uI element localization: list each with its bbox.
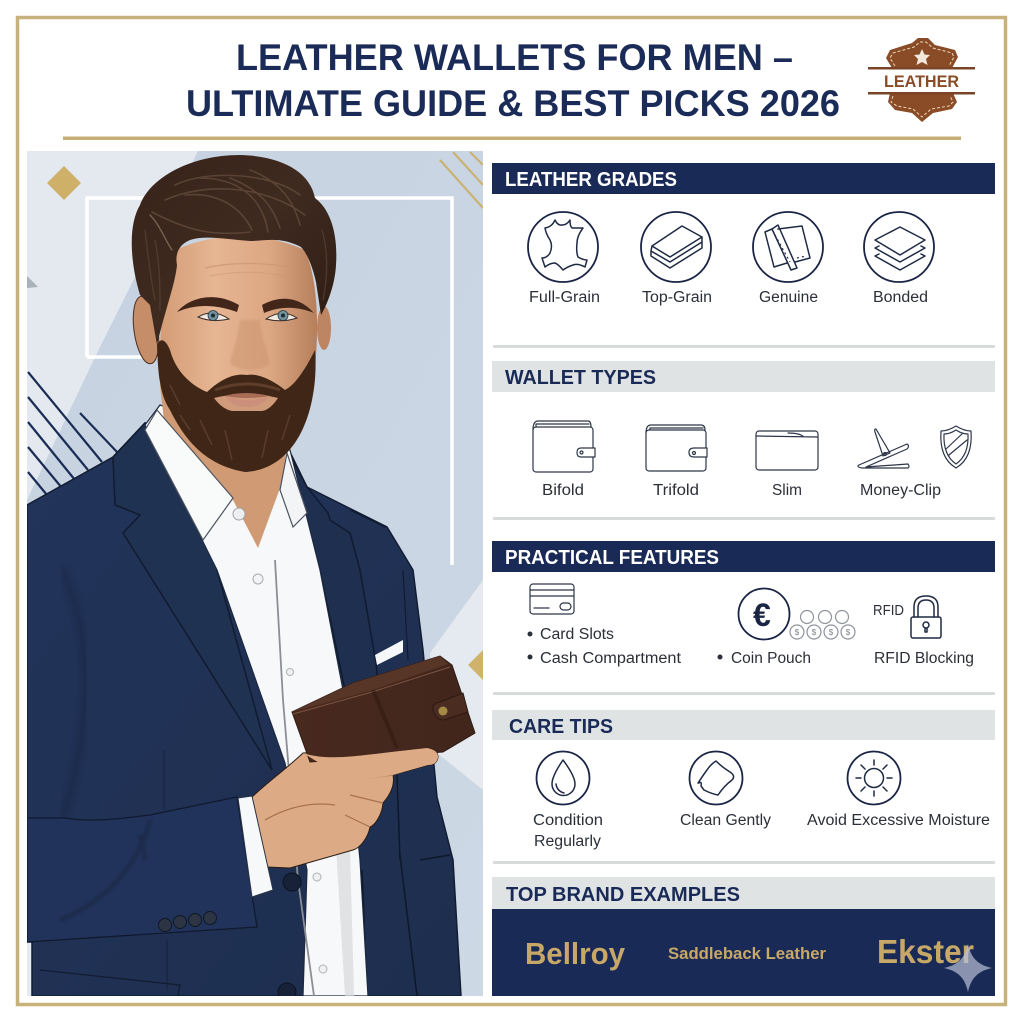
section: top brand examples <box>492 877 995 996</box>
label: Trifold: Trifold <box>653 482 699 499</box>
label: Bonded: Bonded <box>873 289 928 306</box>
beard <box>157 340 316 472</box>
neck <box>160 385 287 548</box>
index finger over wallet <box>303 748 438 782</box>
bullet: coin pouch: Coin Pouch <box>731 650 811 667</box>
icon: euro coin and coins: € <box>753 597 771 633</box>
icon: water drop <box>536 752 590 804</box>
header bar <box>492 877 995 909</box>
mouth <box>214 394 278 411</box>
header bar: LEATHER GRADES <box>505 169 677 191</box>
icon: euro coin and coins: $ <box>795 628 800 637</box>
header bar: CARE TIPS <box>509 716 613 738</box>
icon: bonded layers <box>864 212 934 282</box>
white shirt <box>145 405 368 996</box>
right lapel <box>293 460 378 687</box>
head <box>129 155 336 472</box>
icon: bifold wallet <box>533 421 595 472</box>
section: care tips <box>492 710 995 850</box>
icon: credit card <box>530 584 574 614</box>
header bar <box>492 710 995 740</box>
sleeve <box>27 797 257 942</box>
shirt cuff <box>238 796 273 897</box>
icon: cloth <box>690 752 742 804</box>
bullet list: card slots and cash: Cash Compartment <box>540 650 682 667</box>
geometric background <box>27 151 483 996</box>
header bar <box>492 163 995 194</box>
face <box>160 238 317 392</box>
icon: top-grain stack <box>641 212 711 282</box>
hair <box>132 155 336 345</box>
hand <box>252 748 438 868</box>
label: Slim: Slim <box>772 482 802 499</box>
section: wallet types <box>492 361 995 499</box>
icon: padlock <box>911 596 941 638</box>
label: Clean Gently: Clean Gently <box>680 812 771 829</box>
navy blazer <box>27 423 461 996</box>
icon: euro coin and coins: $ <box>812 628 817 637</box>
label: Bifold: Bifold <box>542 482 584 499</box>
icon: slim wallet <box>756 431 818 470</box>
brand panel <box>492 909 995 996</box>
ears <box>132 296 160 364</box>
header bar <box>492 541 995 572</box>
icon: money clip <box>858 429 909 468</box>
icon: euro coin and coins <box>738 588 855 640</box>
title underline <box>63 136 961 140</box>
label: Top-Grain: Top-Grain <box>642 289 712 306</box>
label: Condition Regularly: Regularly <box>534 833 601 850</box>
icon: genuine leather pieces <box>753 212 823 282</box>
label: RFID Blocking: RFID Blocking <box>874 650 974 667</box>
icon: trifold wallet <box>646 425 707 471</box>
sparkle watermark <box>944 944 992 992</box>
icon: euro coin and coins: $ <box>846 628 851 637</box>
label: Condition Regularly: Condition <box>533 812 603 829</box>
eyebrows <box>177 297 239 312</box>
label: Full-Grain: Full-Grain <box>529 289 600 306</box>
sleeve buttons <box>158 912 216 932</box>
title <box>186 37 840 124</box>
bullet list: card slots and cash <box>528 626 682 667</box>
bullet list: card slots and cash: Card Slots <box>540 626 614 643</box>
left lapel <box>113 423 272 770</box>
leather badge logo <box>868 38 975 122</box>
leather badge logo: LEATHER <box>884 72 959 91</box>
eyes <box>198 310 297 321</box>
brand: Saddleback Leather: Saddleback Leather <box>668 944 826 963</box>
icon: shield <box>941 426 971 468</box>
pocket square <box>375 640 403 665</box>
brown leather wallet <box>292 656 475 762</box>
icon: euro coin and coins: $ <box>829 628 834 637</box>
title: ULTIMATE GUIDE & BEST PICKS 2026 <box>186 83 840 124</box>
section: practical features <box>492 541 995 667</box>
jacket buttons <box>278 873 301 1001</box>
header bar: TOP BRAND EXAMPLES <box>506 884 740 906</box>
header bar: WALLET TYPES <box>505 367 656 389</box>
label: Condition Regularly <box>533 812 603 850</box>
nose <box>230 320 270 371</box>
illustration panel: man holding wallet <box>27 151 483 1001</box>
label: Avoid Excessive Moisture: Avoid Excessive Moisture <box>807 812 990 829</box>
header bar <box>492 361 995 392</box>
label: RFID: RFID <box>873 602 904 619</box>
label: Genuine: Genuine <box>759 289 818 306</box>
title: LEATHER WALLETS FOR MEN – <box>236 37 793 78</box>
shirt collar <box>145 410 307 540</box>
icon: full-grain hide <box>528 212 598 282</box>
header bar: PRACTICAL FEATURES <box>505 547 719 569</box>
brand: Bellroy: Bellroy <box>525 936 626 971</box>
section: leather grades <box>492 163 995 306</box>
label: Money-Clip: Money-Clip <box>860 482 941 499</box>
brand: Ekster: Ekster <box>877 933 974 970</box>
icon: sun <box>848 752 900 804</box>
